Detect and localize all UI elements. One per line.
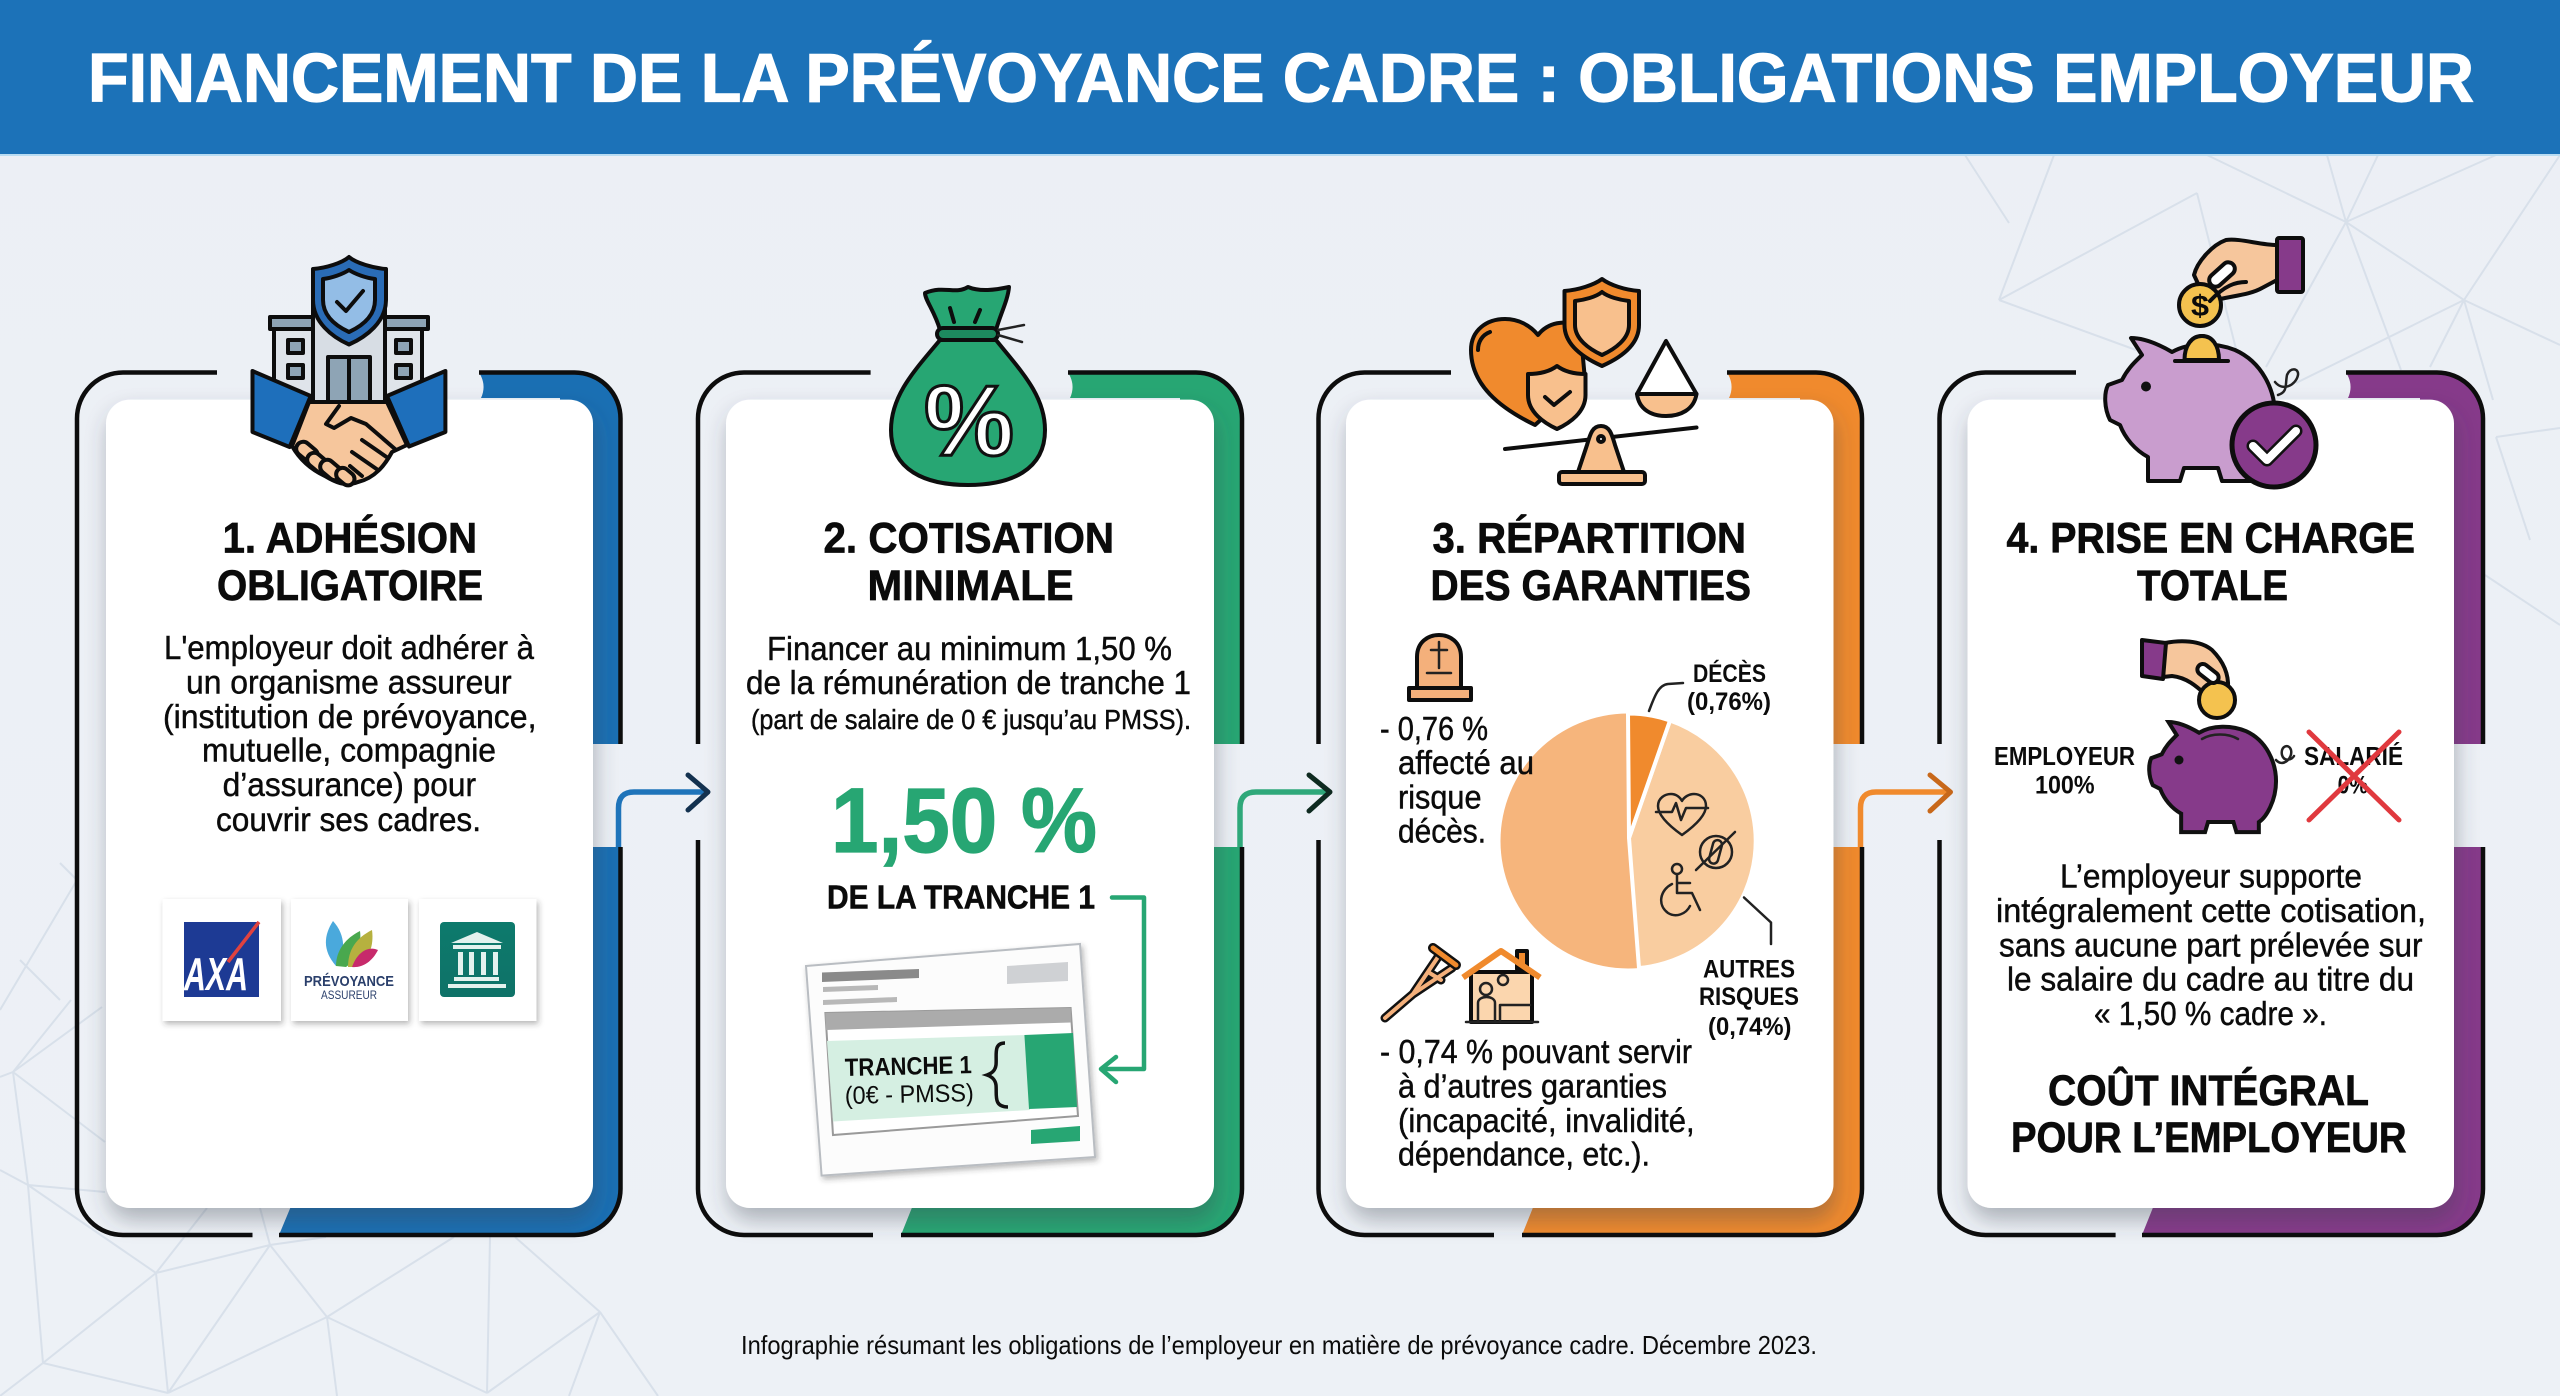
label: tranche 1: TRANCHE 1 [845,1051,972,1082]
conclusion: coût intégral pour l'employeur: POUR L’EMPLOYEUR [2011,1114,2406,1162]
conclusion: coût intégral pour l'employeur: COÛT INTÉGRAL [2048,1066,2369,1115]
logo: prévoyance assureur: PRÉVOYANCE [304,973,394,990]
icon: wheelchair [1661,864,1700,915]
text: 0,76 % affecté au risque décès: décès. [1398,812,1486,850]
text: 0,74 % autres garanties: dépendance, etc.). [1398,1136,1650,1172]
pie chart [1500,713,1756,968]
heading: prise en charge totale: 4. PRISE EN CHARGE [2006,514,2415,562]
icon: house [1463,951,1540,1022]
body text: (part de salaire de 0 € jusqu’au PMSS). [751,704,1191,735]
label: employeur 100%: EMPLOYEUR [1994,741,2135,771]
icon: hand with coin over purple piggy [2142,640,2294,832]
icon: heart with pulse [1656,794,1708,835]
body text [746,630,1191,735]
label: décès [1649,659,1771,716]
heading: cotisation minimale: MINIMALE [868,562,1074,610]
logo: prévoyance assureur: ASSUREUR [321,990,377,1002]
body text [163,629,536,838]
heading: répartition des garanties: 3. RÉPARTITION [1432,514,1746,562]
logo: prévoyance assureur [291,899,408,1021]
heading: adhésion obligatoire: OBLIGATOIRE [217,562,483,610]
icon: crossed pill [1696,832,1735,870]
body text [1996,857,2426,1032]
label: 0€ - PMSS: (0€ - PMSS) [845,1079,974,1110]
panel 3: répartition des garanties [1318,279,1862,1235]
text: 0,74 % autres garanties: (incapacité, invalidité, [1398,1102,1695,1139]
body text: L'employeur doit adhérer à [164,629,535,666]
body text: Financer au minimum 1,50 % [767,630,1172,667]
text: 0,74 % autres garanties [1380,1033,1695,1172]
label: employeur 100%: 100% [2035,772,2095,800]
heading: cotisation minimale: 2. COTISATION [824,514,1114,562]
label: autres risques: RISQUES [1699,983,1799,1011]
text: 0,76 % affecté au risque décès: risque [1398,778,1482,816]
panel 4: prise en charge totale [1940,238,2483,1235]
icon: hand, coin and piggy bank [2105,238,2316,487]
arrow: step 3 to step 4 [1860,775,1950,847]
body text: (institution de prévoyance, [163,698,536,735]
label: décès: DÉCÈS [1693,659,1766,688]
body text: un organisme assureur [186,664,512,700]
body text: d’assurance) pour [223,766,476,803]
text: 0,76 % affecté au risque décès: affecté au [1398,744,1534,781]
heading: prise en charge totale: TOTALE [2137,562,2288,610]
label: salarié 0% crossed out: SALARIÉ [2304,741,2403,771]
label: autres risques [1699,898,1799,1041]
heading: répartition des garanties: DES GARANTIES [1430,562,1751,610]
icon: building, shield and handshake [252,257,445,488]
arrow: step 2 to step 3 [1240,775,1330,847]
icon: hand, coin and piggy bank: $ [2191,290,2209,323]
logo: AXA: AXA [183,948,248,1000]
footer note: Infographie résumant les obligations de l’employeur en matière de prévoyance cadre. Décembre 2023. [741,1330,1817,1360]
big number: 1,50 %: 1,50 % [831,770,1097,872]
body text: L’employeur supporte [2060,857,2362,894]
icon: heart, shields and scale [1471,279,1696,484]
icon: crutch [1385,948,1456,1018]
label: autres risques: (0,74%) [1708,1013,1792,1041]
body text: le salaire du cadre au titre du [2007,961,2414,998]
icon: money bag with percent: % [924,365,1014,477]
logo: AXA [162,899,281,1021]
label: de la tranche 1: DE LA TRANCHE 1 [827,878,1095,916]
text: 0,76 % affecté au risque décès [1380,710,1534,850]
body text: de la rémunération de tranche 1 [746,664,1191,701]
text: 0,74 % autres garanties: - 0,74 % pouvant servir [1380,1033,1692,1070]
body text: intégralement cette cotisation, [1996,892,2426,929]
body text: « 1,50 % cadre ». [2094,995,2327,1032]
arrow: step 1 to step 2 [618,775,708,847]
heading: adhésion obligatoire: 1. ADHÉSION [223,514,477,562]
text: 0,76 % affecté au risque décès: - 0,76 % [1380,710,1488,747]
label: décès: (0,76%) [1687,688,1771,716]
payslip illustration [806,944,1095,1176]
header banner [0,0,2560,156]
label: salarié 0% crossed out [2304,732,2403,820]
icon: tombstone [1409,635,1471,700]
body text: couvrir ses cadres. [216,801,481,838]
panel 2: cotisation minimale [698,287,1242,1235]
text: 0,74 % autres garanties: à d’autres garanties [1398,1068,1667,1104]
icon: money bag with percent [891,287,1045,485]
logo: institution bank [419,899,536,1021]
label: autres risques: AUTRES [1703,956,1795,984]
body text: mutuelle, compagnie [202,732,496,769]
label: salarié 0% crossed out: 0% [2338,772,2368,800]
arrow: tranche 1 to payslip [1101,898,1144,1082]
body text: sans aucune part prélevée sur [1999,927,2423,964]
label: employeur 100% [1994,741,2135,800]
title: FINANCEMENT DE LA PRÉVOYANCE CADRE : OBLIGATIONS EMPLOYEUR [88,40,2474,116]
panel 1: adhésion obligatoire [77,257,620,1235]
